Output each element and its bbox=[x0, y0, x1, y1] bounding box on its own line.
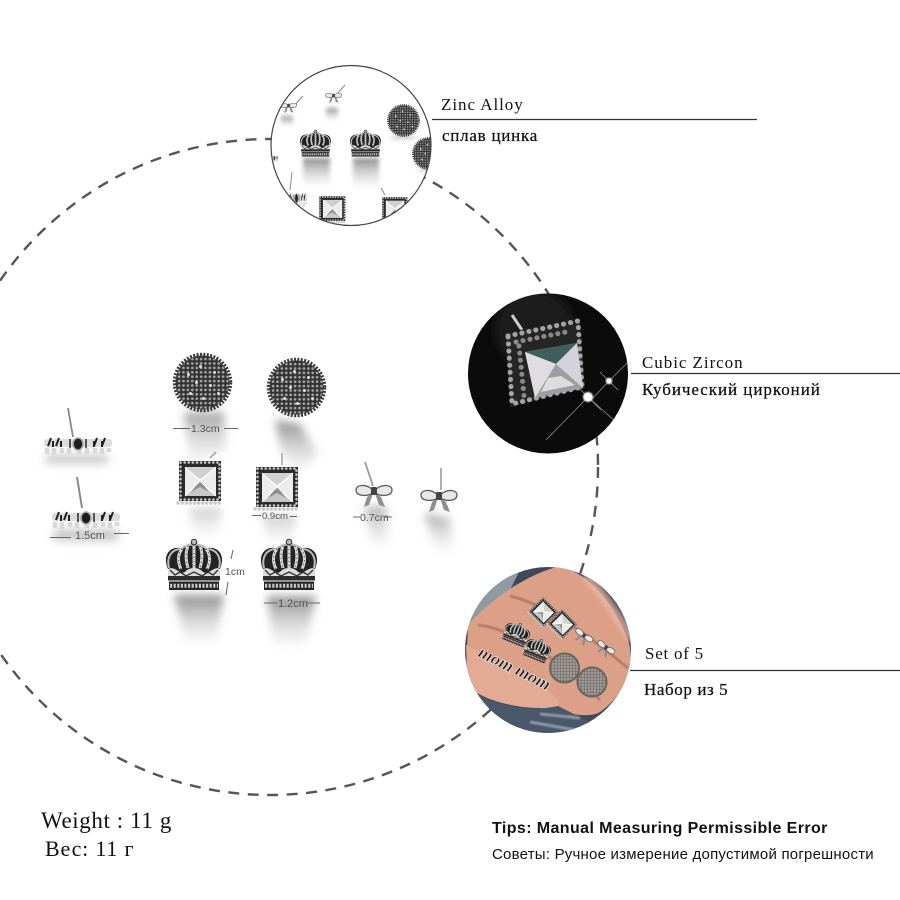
photo: grey fabric top left bbox=[470, 572, 519, 623]
photo: lower finger bbox=[466, 645, 559, 710]
earring: disc pair bbox=[174, 354, 324, 416]
photo: mom mom earrings: mom bbox=[512, 660, 554, 694]
detail: earring post bbox=[512, 315, 522, 330]
text: weight: Вес: 11 г bbox=[45, 836, 134, 861]
callout: zinc alloy bbox=[432, 95, 757, 145]
callout: set of 5: Набор из 5 bbox=[644, 680, 728, 699]
earring: bow pair bbox=[356, 462, 457, 512]
callout: zinc alloy: Zinc Alloy bbox=[441, 95, 524, 114]
text: measuring tips: Tips: Manual Measuring Permissible Error bbox=[492, 820, 828, 837]
label: 0.7cm: 0.7cm bbox=[360, 512, 389, 524]
dashed ring connecting the product circles bbox=[0, 139, 598, 795]
callout: set of 5 bbox=[630, 644, 900, 699]
detail: crowns bbox=[300, 130, 381, 157]
callout: cubic zircon: Cubic Zircon bbox=[642, 353, 744, 372]
photo: diamond earrings bbox=[528, 597, 577, 639]
photo: disc earrings bbox=[550, 654, 606, 696]
label: 1.5cm bbox=[50, 530, 129, 542]
detail: bows and posts bbox=[270, 85, 385, 207]
photo: denim bottom bbox=[478, 694, 590, 733]
label: 0.9cm: 0.9cm bbox=[262, 511, 288, 522]
callout: set of 5: Set of 5 bbox=[645, 644, 704, 663]
photo: fingers shading bbox=[466, 596, 628, 702]
detail: zircon gem bbox=[525, 343, 583, 398]
label: 1.3cm: 1.3cm bbox=[191, 423, 220, 435]
earring: mom pair bbox=[44, 408, 120, 529]
detail: crown shadows bbox=[281, 108, 435, 186]
label: 1.5cm: 1.5cm bbox=[75, 530, 105, 542]
photo: hand bbox=[466, 566, 631, 715]
text: measuring tips: Советы: Ручное измерение допустимой погрешности bbox=[492, 846, 874, 863]
text: weight bbox=[41, 808, 172, 861]
photo: crown earrings bbox=[502, 622, 551, 664]
earring shadows bbox=[46, 412, 453, 645]
label: 1.2cm: 1.2cm bbox=[278, 598, 308, 610]
photo: bow earrings bbox=[574, 628, 616, 658]
callout: zinc alloy: сплав цинка bbox=[442, 126, 538, 145]
earring: crown pair bbox=[166, 539, 317, 590]
photo: mom mom earrings bbox=[477, 648, 550, 691]
detail: sparkles bbox=[546, 360, 630, 440]
panel: hand photo circle bbox=[465, 566, 632, 740]
label: 1.3cm bbox=[173, 423, 238, 435]
detail: squares bbox=[319, 196, 408, 222]
photo: mom mom earrings: mom bbox=[475, 642, 517, 676]
panel: cubic zircon detail circle bbox=[468, 290, 630, 454]
panel: zinc alloy detail circle bbox=[270, 66, 444, 226]
label: 0.9cm bbox=[252, 511, 297, 522]
callout: cubic zircon: Кубический цирконий bbox=[642, 380, 821, 399]
panel: earring set with measurements bbox=[44, 354, 457, 645]
label: 1cm bbox=[225, 550, 245, 595]
detail: square frame bbox=[505, 318, 585, 407]
text: measuring tips bbox=[492, 820, 874, 863]
callout: cubic zircon bbox=[631, 353, 900, 399]
earring: square zircon pair bbox=[178, 452, 299, 509]
detail: discs bbox=[387, 104, 430, 170]
label: 1.2cm bbox=[264, 598, 320, 610]
label: 1cm: 1cm bbox=[225, 566, 245, 578]
text: weight: Weight : 11 g bbox=[41, 808, 172, 833]
